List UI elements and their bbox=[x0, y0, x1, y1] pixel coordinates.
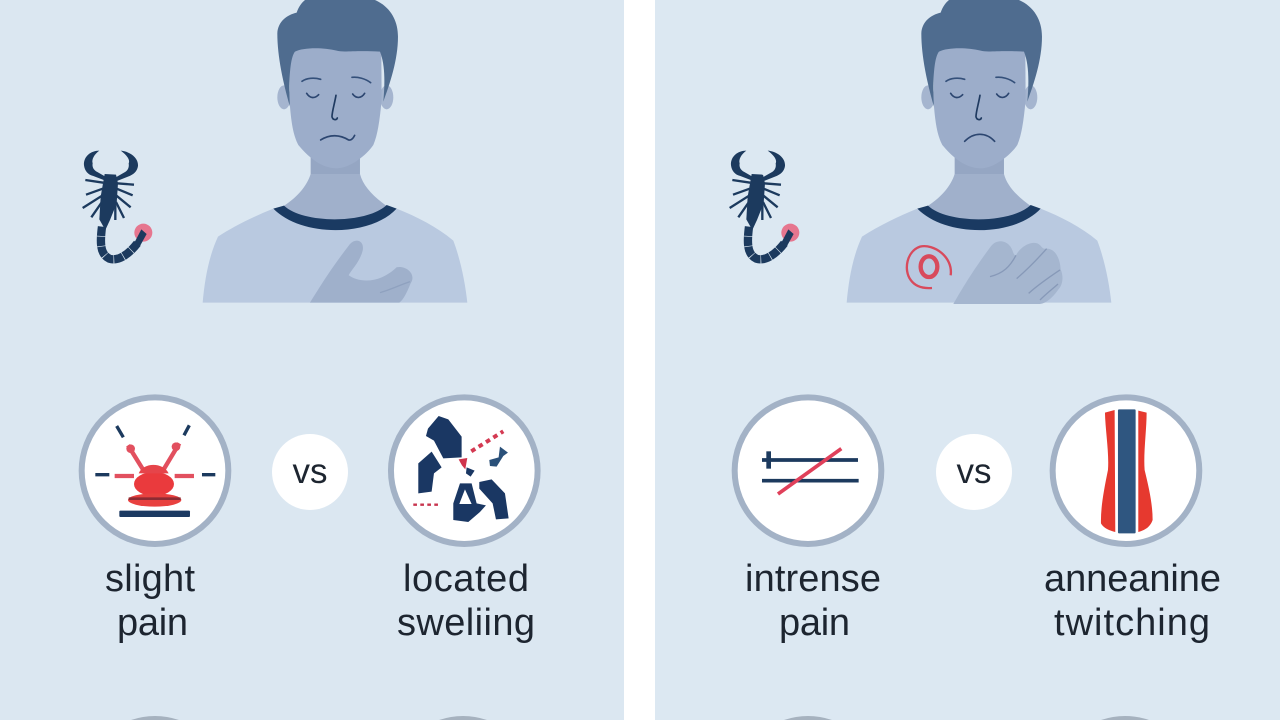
label: anneanine twitching: anneanine bbox=[1044, 558, 1221, 600]
icon: hand on chest bbox=[953, 241, 1062, 304]
label: anneanine twitching: twitching bbox=[1054, 602, 1210, 644]
vs badge right: vs bbox=[956, 452, 992, 491]
panel: left mild symptoms bbox=[82, 0, 538, 720]
label: slight pain: pain bbox=[117, 602, 188, 644]
label: anneanine twitching bbox=[1044, 558, 1221, 644]
icon: intense pain circle bbox=[735, 397, 881, 544]
label: slight pain: slight bbox=[105, 558, 195, 600]
figure: person with slight pain bbox=[203, 0, 467, 303]
vs badge left bbox=[272, 434, 348, 510]
label: located swelling: located bbox=[403, 558, 529, 600]
vs badge left: vs bbox=[292, 452, 328, 491]
label: intense pain bbox=[745, 558, 881, 644]
label: slight pain bbox=[105, 558, 195, 644]
label: located swelling bbox=[397, 558, 535, 644]
icon: located swelling circle bbox=[391, 397, 538, 544]
icon: scorpion right bbox=[730, 151, 799, 259]
icon: chest pain rings bbox=[907, 246, 951, 288]
panel: right severe symptoms bbox=[730, 0, 1221, 720]
panel: left background bbox=[0, 0, 624, 720]
icon: muscle twitching circle bbox=[1053, 397, 1199, 544]
label: intense pain: intrense bbox=[745, 558, 881, 600]
figure: person with intense pain bbox=[847, 0, 1111, 303]
icon: scorpion left bbox=[83, 151, 152, 259]
partial circles bottom right bbox=[784, 716, 1149, 720]
panel: right background bbox=[655, 0, 1280, 720]
label: intense pain: pain bbox=[779, 602, 850, 644]
label: located swelling: sweliing bbox=[397, 602, 535, 644]
icon: slight pain circle bbox=[82, 397, 228, 544]
vs badge right bbox=[936, 434, 1012, 510]
partial circles bottom left bbox=[131, 716, 487, 720]
